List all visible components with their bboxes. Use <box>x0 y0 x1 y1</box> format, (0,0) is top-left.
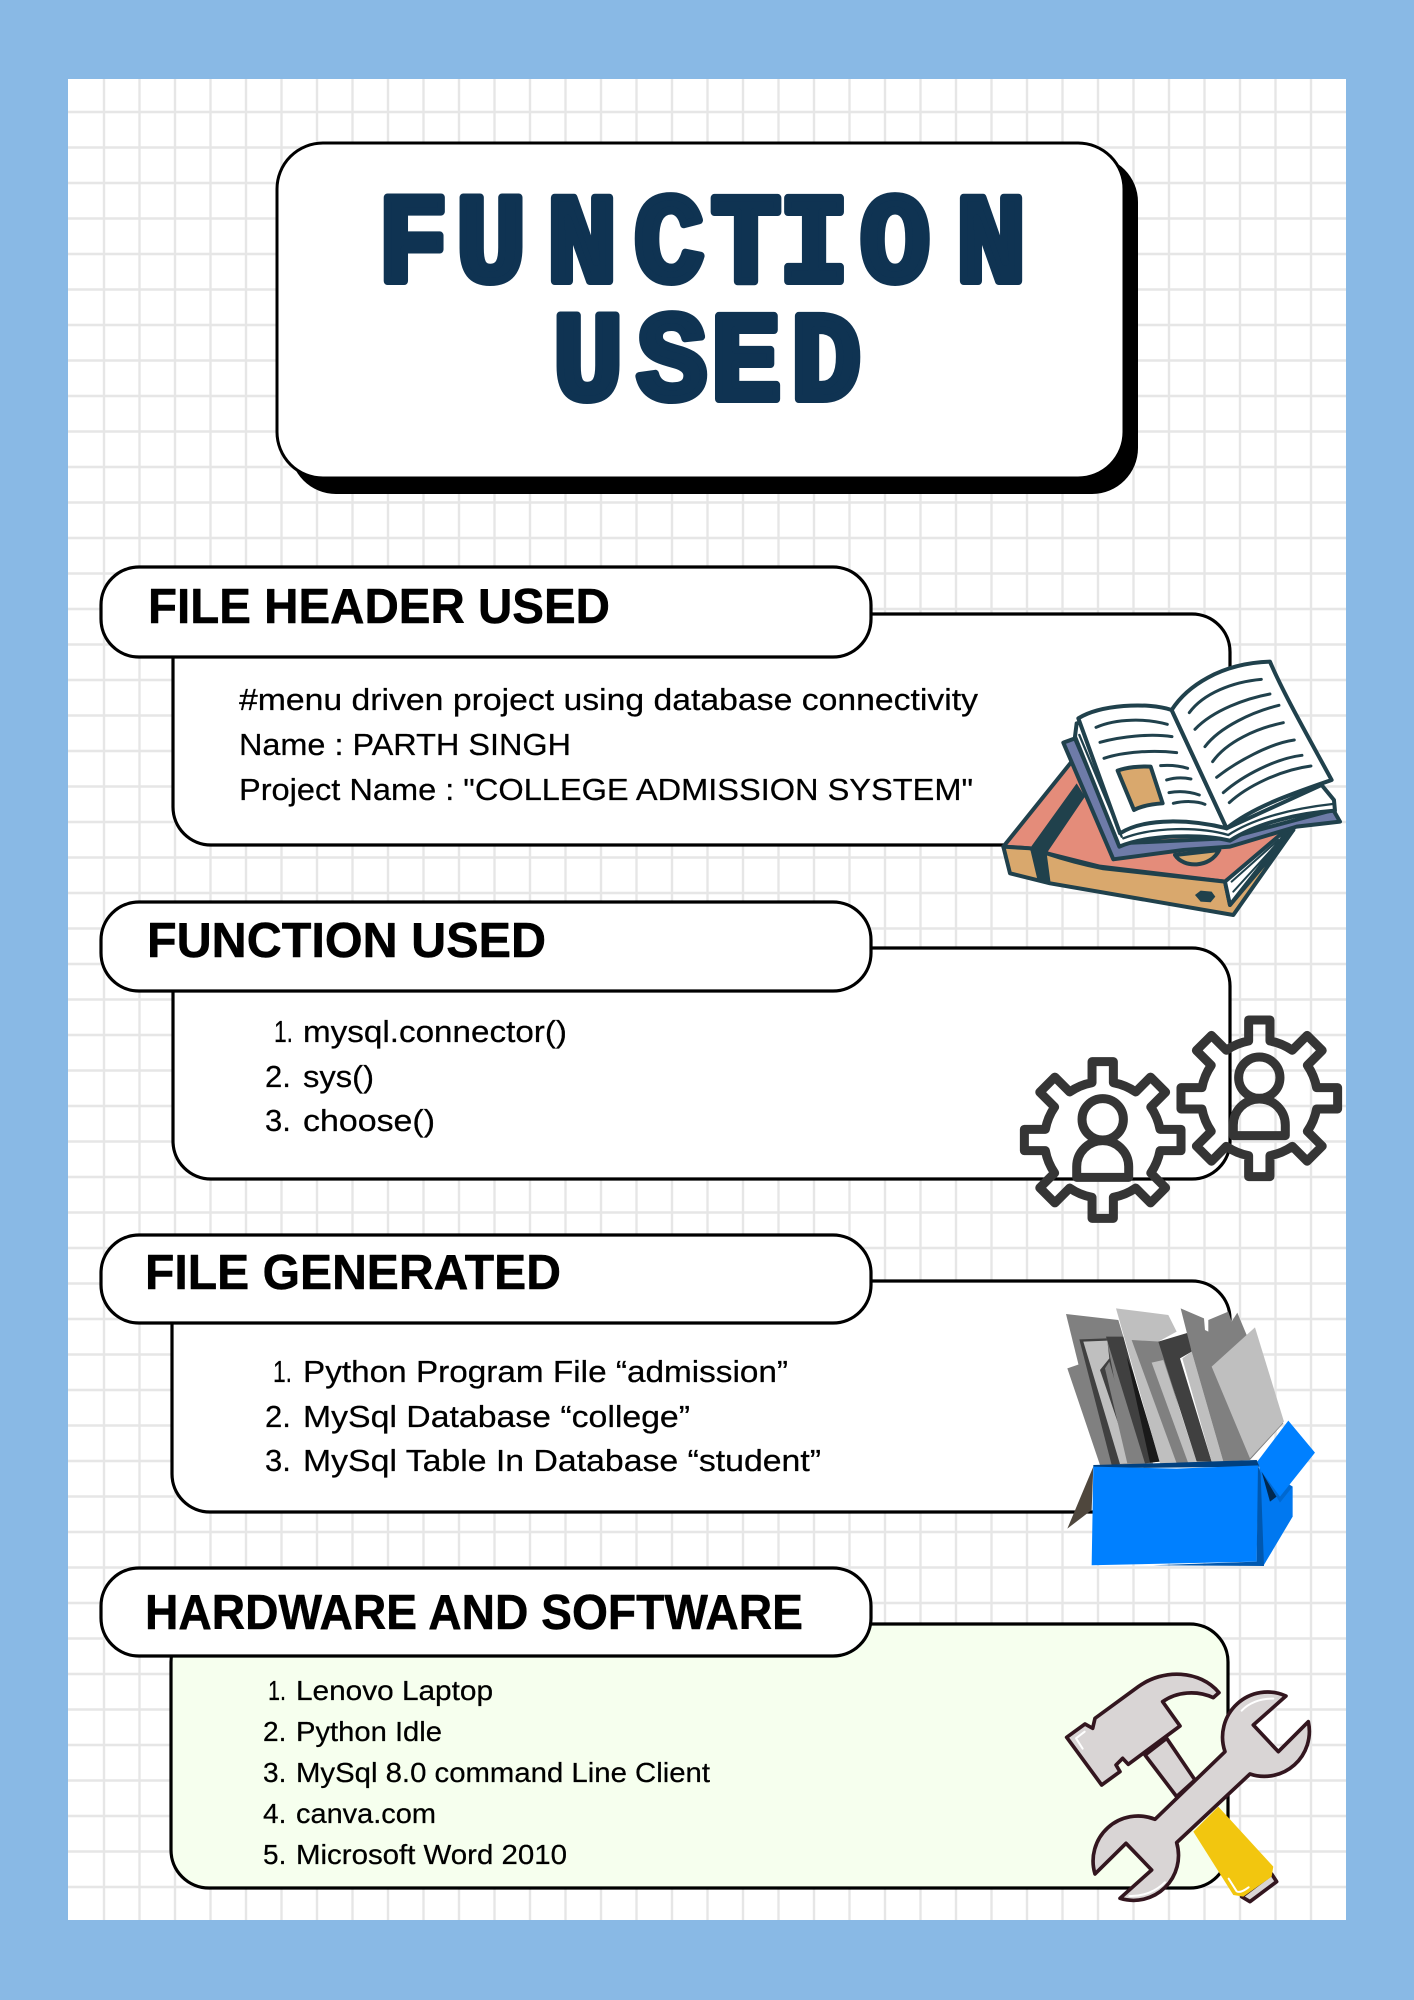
list: 1. <box>268 1675 286 1706</box>
icon: hammer and wrench <box>1067 1674 1309 1902</box>
icon: gears with people <box>1024 1020 1338 1218</box>
title text <box>378 176 1026 437</box>
list: 4. <box>263 1798 286 1829</box>
text block: Name : PARTH SINGH <box>239 727 571 762</box>
text block: #menu driven project using database connectivity <box>239 682 979 717</box>
panel: file header used <box>101 567 1230 845</box>
list: 3. <box>265 1443 291 1478</box>
title text: USED <box>553 294 861 437</box>
gear left <box>1024 1062 1181 1218</box>
panel: hardware and software <box>101 1568 1228 1888</box>
list <box>265 1014 567 1138</box>
list: MySql Table In Database “student” <box>303 1443 821 1478</box>
title card <box>277 143 1138 494</box>
list: 2. <box>265 1399 291 1434</box>
list: 2. <box>265 1059 291 1094</box>
heading: FILE HEADER USED <box>148 580 610 634</box>
list <box>263 1675 710 1870</box>
title text: FUNCTION <box>378 176 1026 319</box>
list: sys() <box>303 1059 374 1094</box>
heading: FUNCTION USED <box>147 914 546 968</box>
list: 3. <box>263 1757 286 1788</box>
list: 1. <box>274 1014 293 1049</box>
icon: books <box>1003 662 1340 915</box>
text block: Project Name : "COLLEGE ADMISSION SYSTEM" <box>239 772 973 807</box>
list: Microsoft Word 2010 <box>296 1839 567 1870</box>
text block <box>239 682 979 807</box>
heading: FILE GENERATED <box>145 1246 561 1300</box>
list: canva.com <box>296 1798 436 1829</box>
list: MySql 8.0 command Line Client <box>296 1757 710 1788</box>
list: mysql.connector() <box>303 1014 567 1049</box>
list: Python Program File “admission” <box>303 1354 788 1389</box>
list: 5. <box>263 1839 286 1870</box>
heading: HARDWARE AND SOFTWARE <box>145 1586 803 1640</box>
panel: function used <box>101 902 1230 1179</box>
panel: file generated <box>101 1235 1230 1512</box>
list: MySql Database “college” <box>303 1399 690 1434</box>
list <box>265 1354 821 1478</box>
list: 2. <box>263 1716 286 1747</box>
gear right <box>1181 1020 1338 1177</box>
list: 1. <box>273 1354 292 1389</box>
icon: box of folders <box>1066 1308 1315 1566</box>
list: Lenovo Laptop <box>296 1675 493 1706</box>
list: Python Idle <box>296 1716 442 1747</box>
list: choose() <box>303 1103 435 1138</box>
list: 3. <box>265 1103 291 1138</box>
